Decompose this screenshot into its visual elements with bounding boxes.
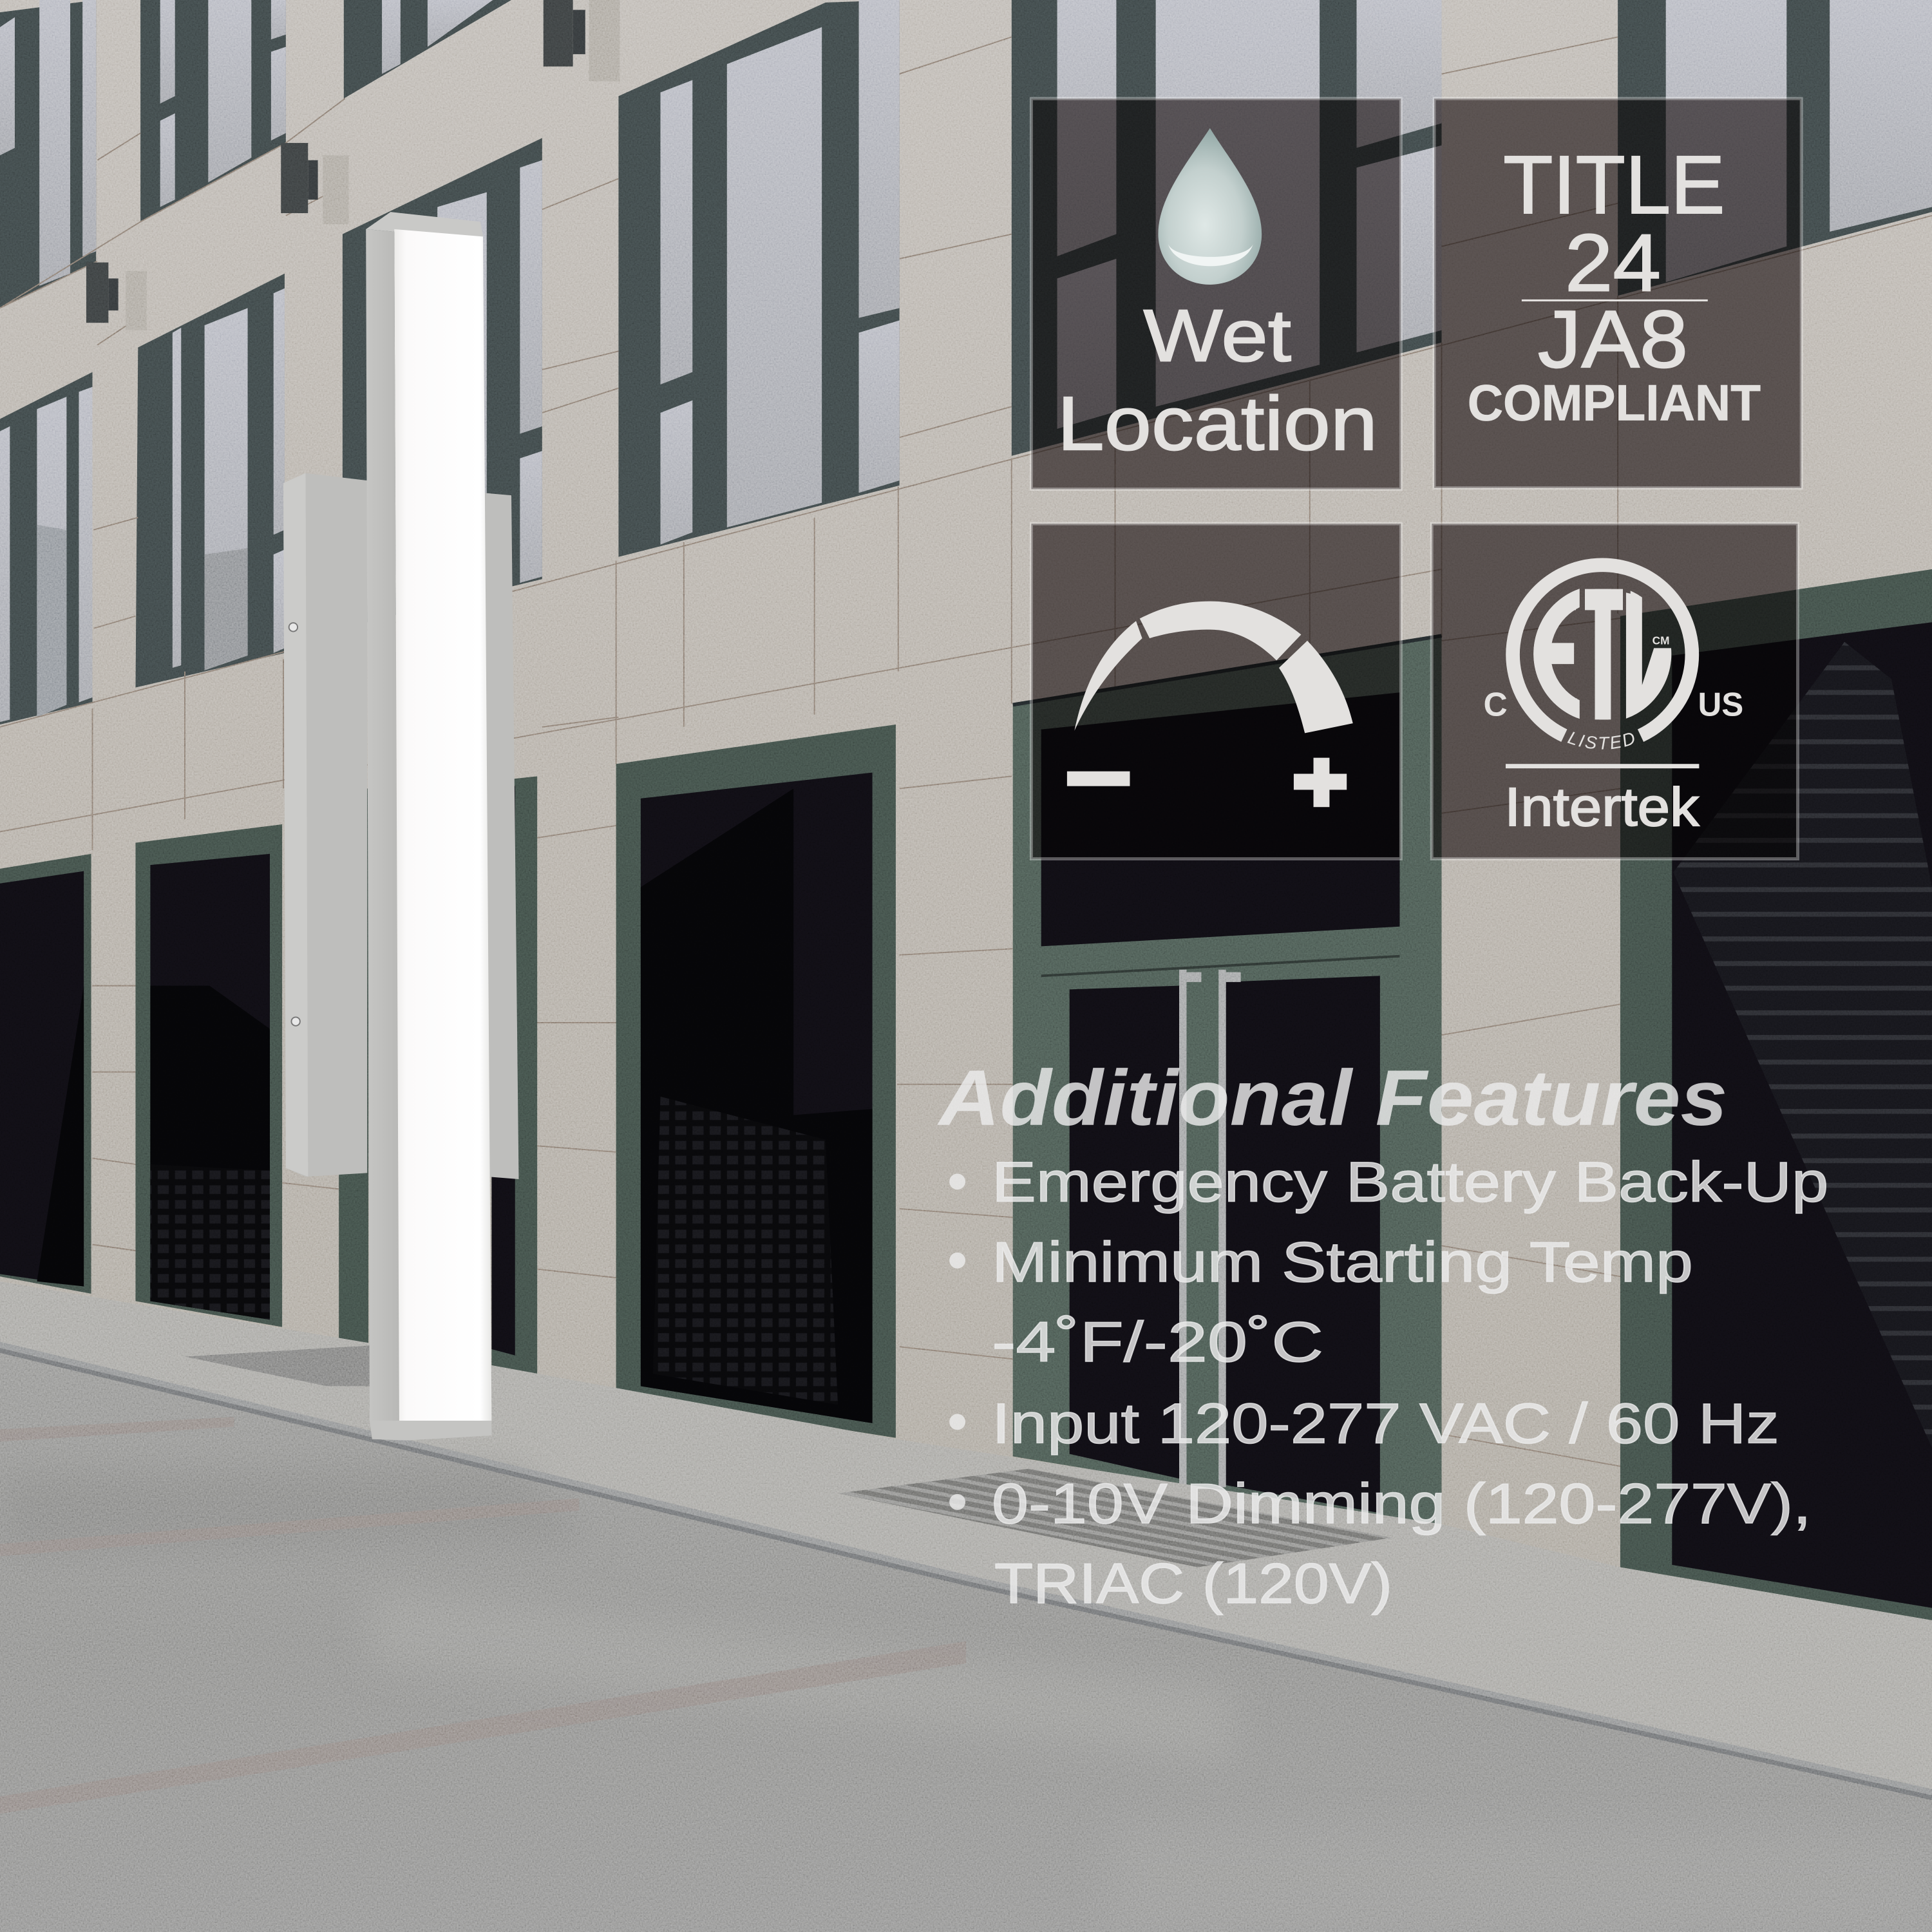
logo: ETL listed mark: US: [1698, 686, 1743, 723]
panel: dimming: [1031, 524, 1401, 859]
lit column: [366, 212, 491, 1441]
plaza pavement: [0, 1352, 1932, 1932]
ground floor windows: [0, 569, 1932, 1620]
curb: [0, 1342, 1932, 1800]
logo: ETL listed mark: LISTED: [1567, 732, 1634, 750]
bullet: input voltage: Input 120-277 VAC / 60 Hz: [992, 1391, 1779, 1455]
additional features list: [937, 1054, 1828, 1615]
bullet: emergency battery: Emergency Battery Back-Up: [992, 1150, 1828, 1213]
bullet: minimum starting temp: Minimum Starting Temp: [992, 1230, 1693, 1294]
label: wet location: [1057, 295, 1378, 466]
title 24 JA8 compliant text: 24: [1565, 218, 1661, 308]
panel: ETL listed: [1430, 522, 1799, 860]
panel: wet location: [1031, 99, 1401, 489]
heading: Additional Features: [937, 1054, 1727, 1142]
title 24 JA8 compliant text: COMPLIANT: [1468, 374, 1761, 431]
logo: ETL listed mark: L: [1627, 548, 1663, 760]
back housing: [283, 473, 518, 1179]
icon: dimmer gauge: [1067, 601, 1353, 807]
logo: ETL listed mark: E: [1538, 548, 1580, 760]
sidewalk: [0, 1282, 1932, 1811]
icon: water drop: [1158, 128, 1262, 285]
door handles: [1179, 970, 1241, 1487]
product: illuminated wall light: [283, 212, 518, 1441]
logo: ETL listed mark: CM: [1653, 634, 1669, 647]
title 24 JA8 compliant text: JA8: [1538, 294, 1688, 384]
upper floor windows: [0, 0, 1932, 724]
bullet: minimum starting temp: [949, 1230, 1693, 1374]
logo: ETL listed mark: Intertek: [1504, 777, 1700, 837]
label: wet location: Wet: [1144, 295, 1291, 377]
wall seams: [0, 37, 1932, 1466]
floor grates: [185, 1345, 1392, 1567]
pavement shading patches: [0, 1466, 1932, 1932]
bullet: dimming: TRIAC (120V): [994, 1551, 1392, 1615]
title 24 JA8 compliant text: TITLE: [1503, 139, 1725, 231]
wall sconces: [86, 0, 620, 330]
logo: ETL listed mark: T: [1584, 548, 1624, 760]
logo: ETL listed mark: C: [1484, 686, 1508, 723]
bullet: dimming: 0-10V Dimming (120-277V),: [992, 1472, 1811, 1535]
panel: title 24: [1434, 99, 1801, 488]
title 24 JA8 compliant text: [1468, 139, 1761, 431]
brick strips on pavement: [0, 1417, 966, 1814]
logo: ETL listed mark: [1484, 558, 1743, 837]
bullet: dimming: [949, 1472, 1811, 1615]
label: wet location: Location: [1057, 381, 1378, 466]
bullet: minimum starting temp: -4˚F/-20˚C: [992, 1310, 1323, 1374]
